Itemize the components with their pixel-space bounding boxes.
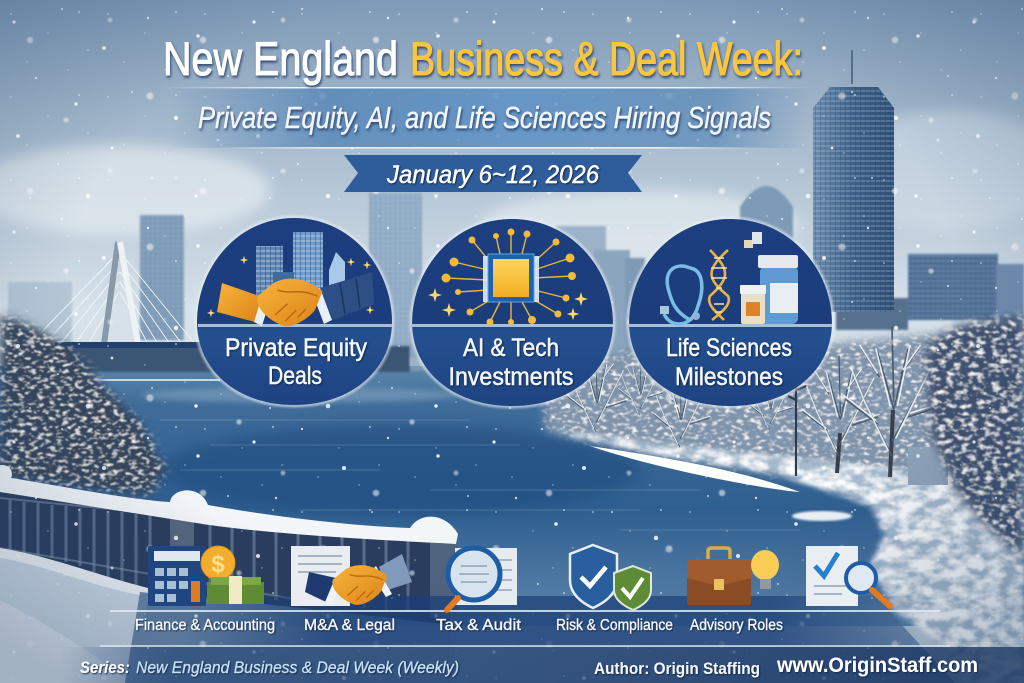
icon: checklist and magnifier: [806, 546, 890, 606]
icon: city buildings: [256, 232, 345, 300]
panel: Life Sciences Milestones: [629, 219, 832, 406]
label: Life Sciences Milestones: [666, 334, 792, 391]
foreground snow and dark water: [0, 548, 150, 683]
label: Private Equity Deals: Private Equity: [225, 334, 367, 362]
footer credits: www.OriginStaff.com: [776, 654, 978, 677]
footer credits: Series:: [80, 658, 130, 677]
footer credits: Author: Origin Staffing: [594, 659, 760, 678]
role labels: Finance & Accounting: [135, 617, 275, 634]
balustrade: [0, 465, 458, 625]
icon: calculator and money: [148, 546, 264, 606]
label: AI & Tech Investments: [448, 334, 574, 391]
Prudential tower: [813, 50, 894, 312]
title: [163, 32, 803, 85]
label: Private Equity Deals: Deals: [268, 362, 322, 390]
role labels: Advisory Roles: [690, 617, 783, 634]
panel: AI & Tech Investments: [411, 219, 613, 406]
roles band: [60, 596, 1024, 683]
shed: [908, 447, 948, 485]
role labels: M&A & Legal: [304, 617, 395, 634]
icon: magnifier on document: [447, 548, 517, 610]
Zakim bridge: [30, 242, 205, 345]
subtitle: Private Equity, AI, and Life Sciences Hiring Signals: [198, 100, 771, 135]
date ribbon: January 6~12, 2026: [386, 161, 599, 189]
role labels: Tax & Audit: [436, 617, 522, 634]
title: New England: [163, 32, 398, 85]
title banner: [160, 32, 810, 148]
footer credits: [80, 654, 978, 678]
right forest: [925, 315, 1024, 560]
river: [0, 366, 1024, 626]
icon: medicine bottles: [740, 232, 798, 324]
role labels: Risk & Compliance: [556, 617, 673, 634]
icon: calculator and money: $: [211, 551, 225, 578]
icon: shields: [570, 545, 651, 610]
role labels: [135, 617, 783, 634]
panel: Private Equity Deals: [197, 218, 392, 405]
lamp post: [788, 386, 806, 476]
icon: stethoscope: [660, 266, 702, 324]
label: AI & Tech Investments: AI & Tech: [463, 334, 559, 362]
icon: DNA helix: [709, 250, 729, 320]
icon: contract and handshake: [291, 546, 412, 606]
label: Life Sciences Milestones: Life Sciences: [666, 334, 792, 362]
background trees on the right bank: [545, 325, 1024, 490]
title: Business & Deal Week:: [410, 32, 803, 85]
date ribbon: [344, 155, 642, 192]
icon: handshake: [217, 272, 374, 326]
footer credits: New England Business & Deal Week (Weekly): [136, 658, 459, 677]
label: Private Equity Deals: [225, 334, 367, 390]
icon: AI chip: [428, 228, 588, 326]
far skyline: [8, 186, 1024, 360]
icon: briefcase and bulb: [687, 548, 779, 605]
label: Life Sciences Milestones: Milestones: [675, 363, 783, 391]
right bank trees: [566, 353, 628, 432]
snow bank: [545, 430, 1024, 683]
left bank trees: [0, 315, 165, 495]
label: AI & Tech Investments: Investments: [448, 363, 574, 391]
